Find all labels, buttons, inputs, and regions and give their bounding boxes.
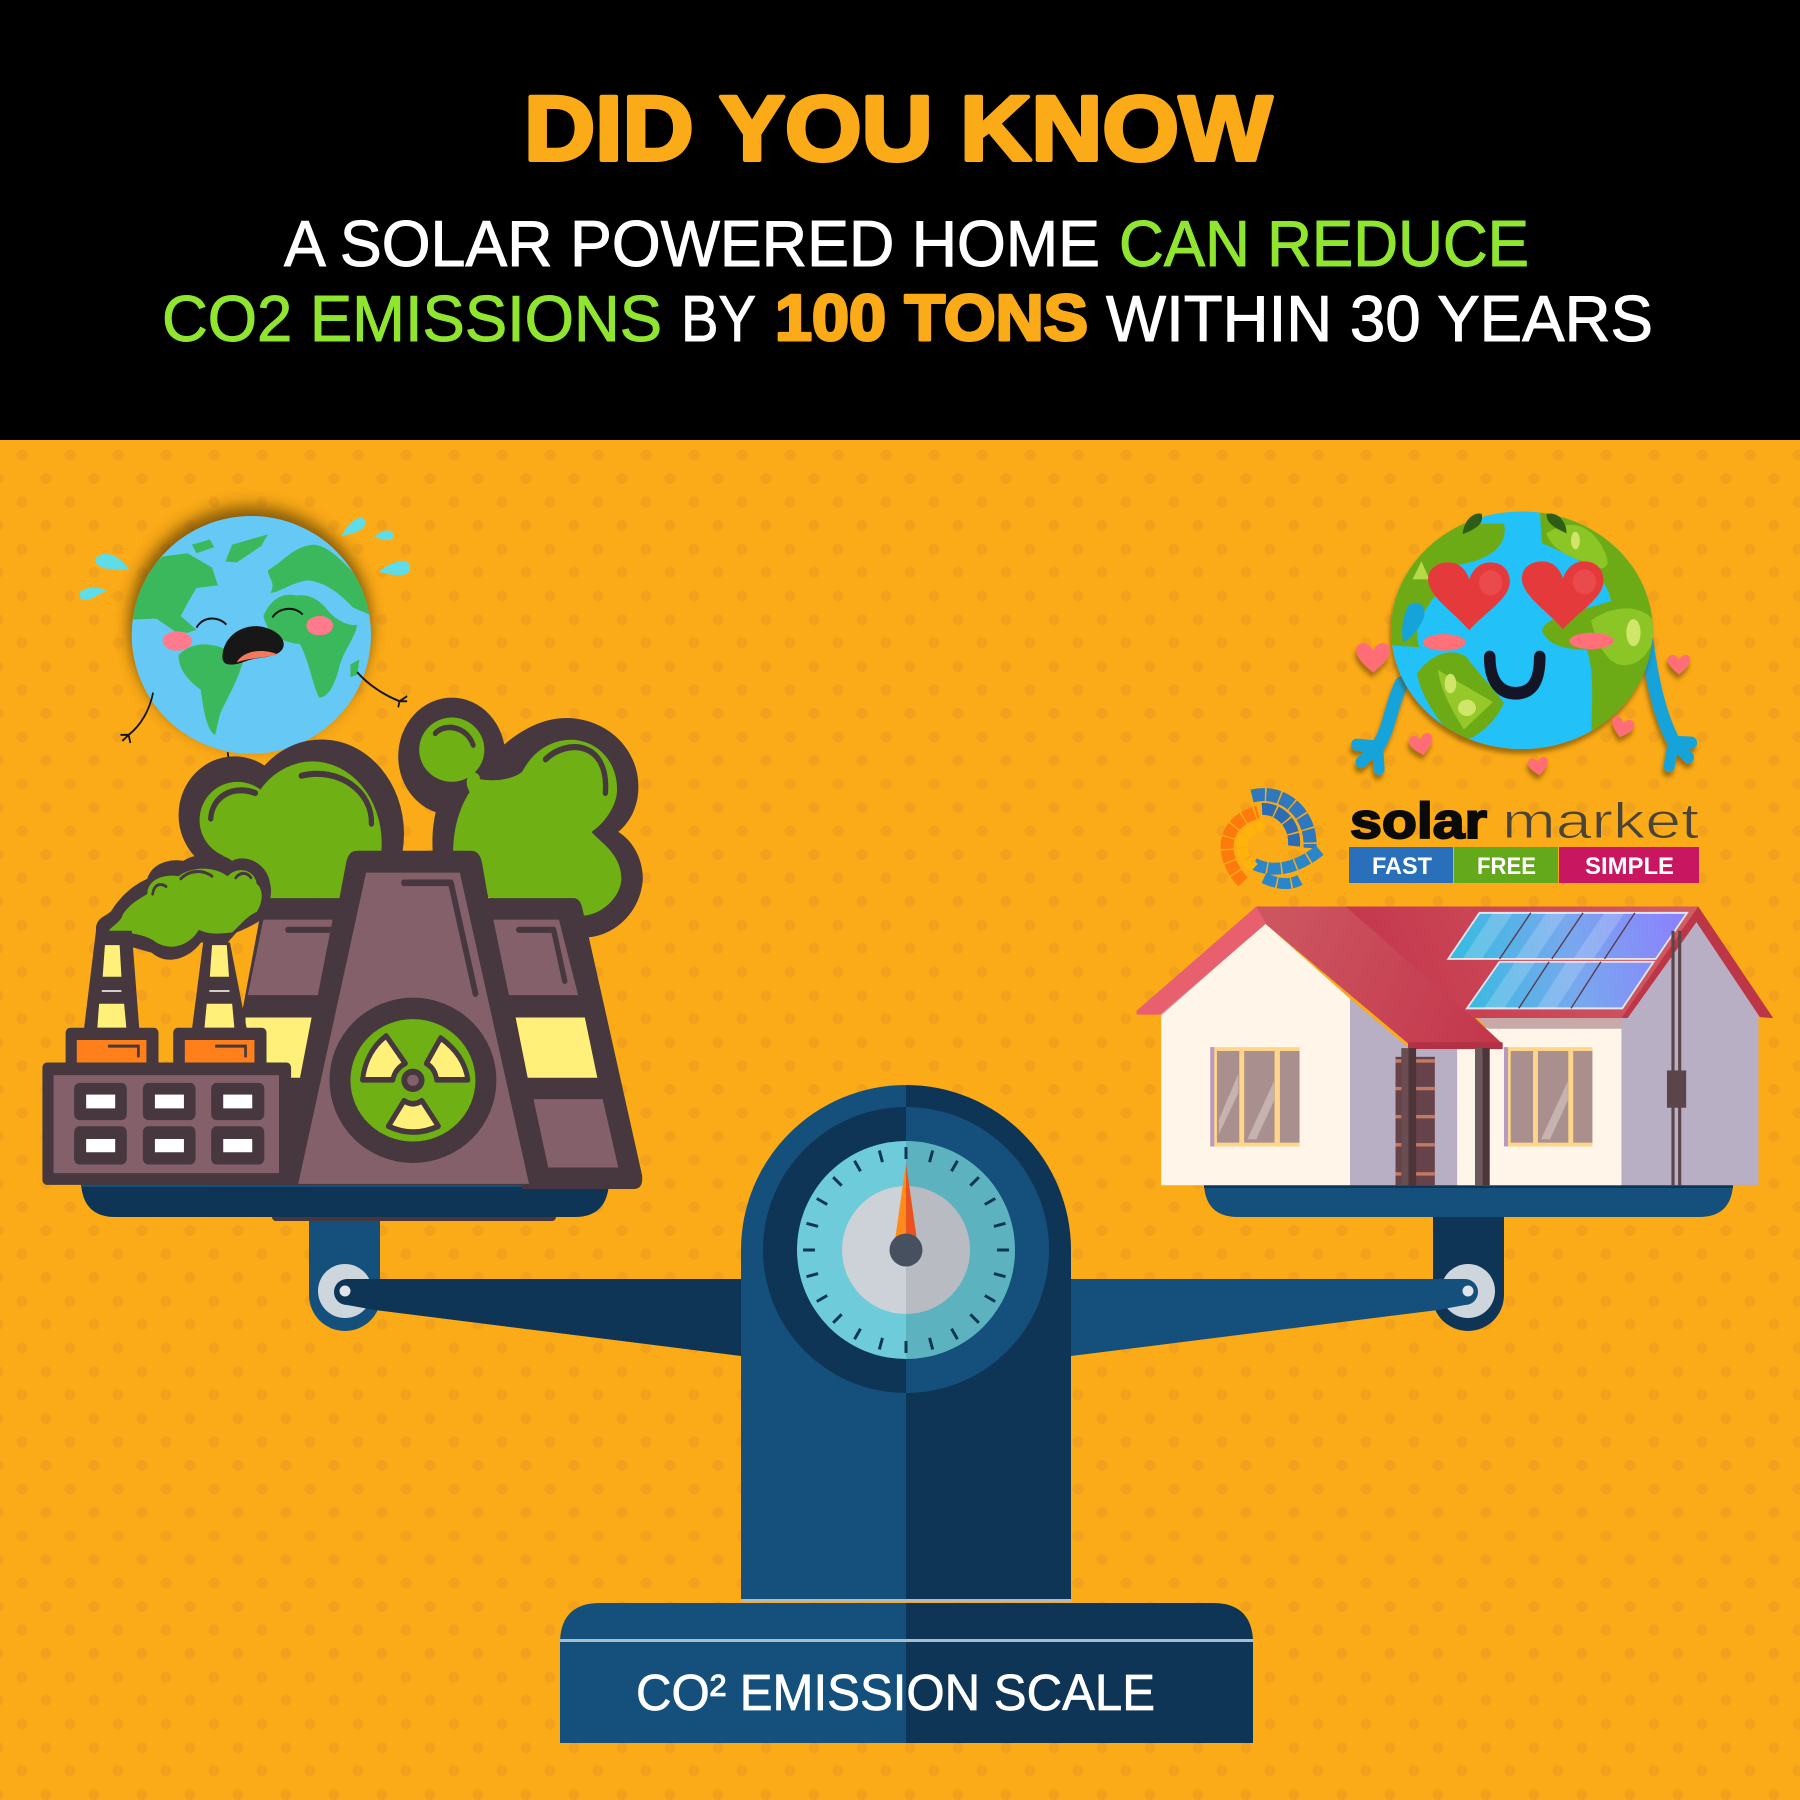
left strut and pivot: [309, 1210, 381, 1331]
base: [560, 1603, 1253, 1743]
smile: [1490, 657, 1540, 693]
header band: [0, 0, 1800, 440]
globe body: [1386, 509, 1658, 751]
headline line 1: CAN REDUCE: [1119, 207, 1529, 280]
solar house: [1137, 907, 1773, 1185]
solarmarket logo: [1227, 793, 1699, 884]
dial ring: [763, 1107, 1049, 1393]
blue arms: [1357, 642, 1692, 769]
column foot line: [741, 1599, 1071, 1602]
side cooling tower left: [210, 898, 353, 1185]
solar panels: [1448, 913, 1687, 1008]
door: [1396, 1057, 1435, 1185]
factory block: [42, 1062, 291, 1185]
logo mark: [1227, 795, 1320, 884]
headline line 2: BY: [681, 282, 756, 355]
side cooling tower right: [480, 898, 642, 1189]
needle: [890, 1163, 922, 1266]
earth globe: [132, 516, 371, 754]
wordmark: solar: [1350, 793, 1487, 849]
tagline bars: FAST: [1372, 853, 1432, 880]
headline line 2: 100 TONS: [775, 281, 1088, 354]
left smoke cloud: [179, 739, 404, 928]
scale label: CO² EMISSION SCALE: [636, 1664, 1155, 1721]
centre wall: [1350, 999, 1457, 1185]
continents: [129, 534, 373, 735]
small factory smoke: [96, 854, 271, 960]
column: [741, 1085, 1071, 1600]
right arm: [1071, 1279, 1478, 1356]
arms: [121, 672, 407, 759]
headline line 2: [162, 281, 1653, 355]
central cooling tower: [286, 851, 538, 1185]
radiation symbol: [329, 998, 496, 1163]
floating hearts: [1356, 643, 1690, 777]
headline line 1: [284, 207, 1529, 280]
left window: [1210, 1047, 1300, 1147]
crying earth: [79, 506, 410, 759]
tears: [79, 518, 410, 600]
right strut and pivot: [1432, 1210, 1504, 1331]
cheeks: [163, 616, 333, 651]
left pan: [81, 1183, 609, 1221]
heart eyes: [1428, 561, 1604, 630]
tagline bars: FREE: [1477, 853, 1536, 880]
right window: [1504, 1047, 1592, 1147]
wordmark: market: [1502, 793, 1699, 849]
crying mouth: [222, 626, 284, 665]
roof: [1137, 907, 1773, 1049]
chimneys: [84, 931, 247, 1029]
left cream wall: [1161, 924, 1350, 1185]
tagline bars: SIMPLE: [1585, 853, 1674, 880]
blush cheeks: [1423, 633, 1614, 651]
eyes: [196, 609, 303, 628]
earth shadow: [129, 506, 371, 746]
tagline bars: [1349, 847, 1699, 883]
right pan: [1204, 1185, 1733, 1217]
dial centre: [842, 1186, 970, 1314]
wordmark: [1350, 793, 1699, 849]
right gable wall: [1621, 919, 1758, 1185]
porch posts: [1401, 1048, 1490, 1185]
headline line 1: A SOLAR POWERED HOME: [284, 207, 1100, 280]
dial face: [797, 1141, 1015, 1359]
right smoke cloud: [398, 698, 643, 937]
power plant: [42, 698, 643, 1189]
headline line 2: CO2 EMISSIONS: [162, 282, 662, 355]
conduit and meter box: [1667, 931, 1686, 1185]
pivot pins: [340, 1286, 1474, 1296]
happy earth: [1356, 509, 1692, 777]
title: DID YOU KNOW: [524, 78, 1272, 180]
left arm: [334, 1279, 741, 1356]
chimney bases: [66, 1028, 267, 1069]
balance scale: [309, 1085, 1504, 1743]
dial ticks: [803, 1147, 1009, 1353]
headline line 2: WITHIN 30 YEARS: [1106, 282, 1653, 355]
middle cream wall: [1457, 1016, 1621, 1185]
